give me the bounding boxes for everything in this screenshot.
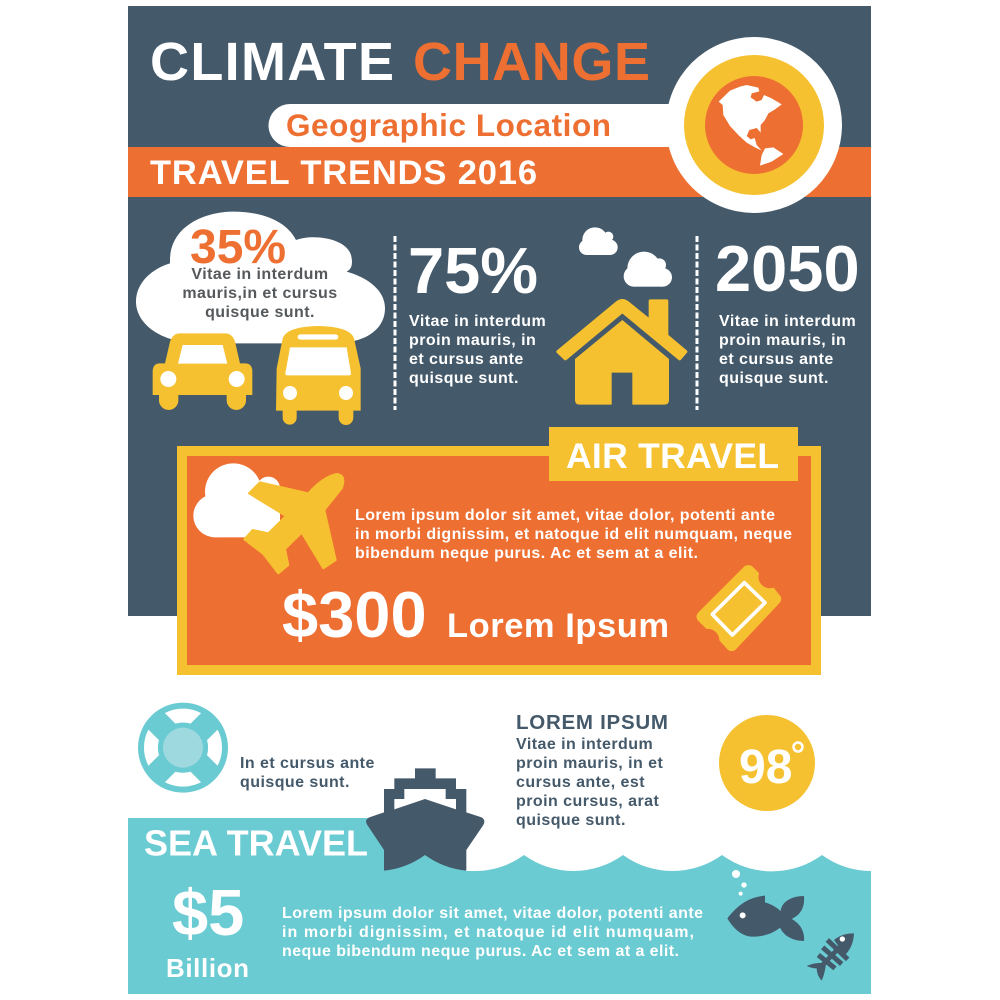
stat: 75%: quisque sunt.	[409, 370, 519, 387]
icon: fish skeleton	[807, 933, 854, 981]
text: lorem ipsum block: proin mauris, in et	[516, 755, 663, 772]
icon: bus	[276, 326, 361, 425]
text: lorem ipsum block: quisque sunt.	[516, 812, 626, 829]
icon: globe	[666, 37, 842, 213]
title: CHANGE	[413, 32, 650, 92]
text: sea travel description: Lorem ipsum dolor sit amet, vitae dolor, potenti ante	[282, 905, 703, 922]
panel: air travel	[182, 427, 816, 670]
icon: ship	[366, 768, 484, 871]
banner: travel trends	[128, 147, 871, 197]
icon: lifebuoy	[138, 703, 228, 793]
text: lorem ipsum block: Vitae in interdum	[516, 736, 653, 753]
heading: air travel: AIR TRAVEL	[566, 436, 779, 476]
stat: $300	[282, 578, 669, 651]
stat: 2050: proin mauris, in	[719, 332, 846, 349]
badge: 98 degrees: 98	[739, 741, 792, 794]
stat: 35% cloud: quisque sunt.	[205, 304, 315, 321]
text: air travel description: Lorem ipsum dolor sit amet, vitae dolor, potenti ante	[355, 507, 775, 524]
stat: 2050: et cursus ante	[719, 351, 834, 368]
panel: header background	[128, 6, 871, 616]
heading: air travel	[549, 427, 798, 481]
title: CLIMATE	[150, 32, 394, 92]
stat: 35% cloud: mauris,in et cursus	[182, 285, 338, 302]
text: air travel description: in morbi dignissim, et natoque id elit numquam, neque	[355, 526, 792, 543]
text: sea travel description: neque bibendum neque purus. Ac et sem at a elit.	[282, 943, 679, 960]
subtitle pill: Geographic Location	[286, 107, 611, 143]
banner: travel trends: TRAVEL TRENDS 2016	[150, 154, 537, 192]
stat: 2050	[715, 232, 860, 387]
stat: 35% cloud: 35%	[190, 221, 286, 274]
stat: $5 billion: $5	[172, 876, 244, 949]
stat: $300: Lorem Ipsum	[447, 607, 669, 645]
stat: $5 billion	[166, 876, 249, 983]
stat: 75%	[408, 234, 546, 387]
text: lorem ipsum block: proin cursus, arat	[516, 793, 659, 810]
text: sea travel description: in morbi dignissim, et natoque id elit numquam,	[282, 924, 694, 941]
icon: fish with bubbles	[727, 870, 804, 941]
heading: sea travel: SEA TRAVEL	[144, 822, 368, 864]
text: air travel description: bibendum neque purus. Ac et sem at a elit.	[355, 545, 698, 562]
text: sea travel description	[282, 905, 703, 960]
icon: car	[153, 333, 252, 410]
stat: 75%: proin mauris, in	[409, 332, 536, 349]
text: air travel description	[355, 507, 792, 562]
badge: 98 degrees	[719, 715, 815, 811]
stat: 75%: Vitae in interdum	[409, 313, 546, 330]
stat: 2050: Vitae in interdum	[719, 313, 856, 330]
stat: $5 billion: Billion	[166, 953, 249, 983]
title	[150, 32, 650, 92]
text: lifebuoy caption: quisque sunt.	[240, 774, 350, 791]
text: lifebuoy caption	[240, 755, 375, 791]
panel: sea travel water	[128, 818, 871, 994]
stat: 75%: 75%	[408, 234, 538, 307]
icon: cloud and plane	[193, 463, 343, 573]
text: lorem ipsum block: LOREM IPSUM	[516, 711, 668, 734]
subtitle pill	[268, 104, 700, 147]
text: lifebuoy caption: In et cursus ante	[240, 755, 375, 772]
text: lorem ipsum block: cursus ante, est	[516, 774, 645, 791]
stat: $300: $300	[282, 578, 427, 651]
stat: 75%: et cursus ante	[409, 351, 524, 368]
text: lorem ipsum block	[516, 711, 668, 829]
icon: house with clouds	[558, 227, 686, 405]
stat: 2050: quisque sunt.	[719, 370, 829, 387]
icon: ticket	[697, 566, 781, 650]
stat: 35% cloud	[136, 212, 385, 343]
stat: 35% cloud: Vitae in interdum	[191, 266, 329, 283]
stat: 2050: 2050	[715, 232, 860, 305]
